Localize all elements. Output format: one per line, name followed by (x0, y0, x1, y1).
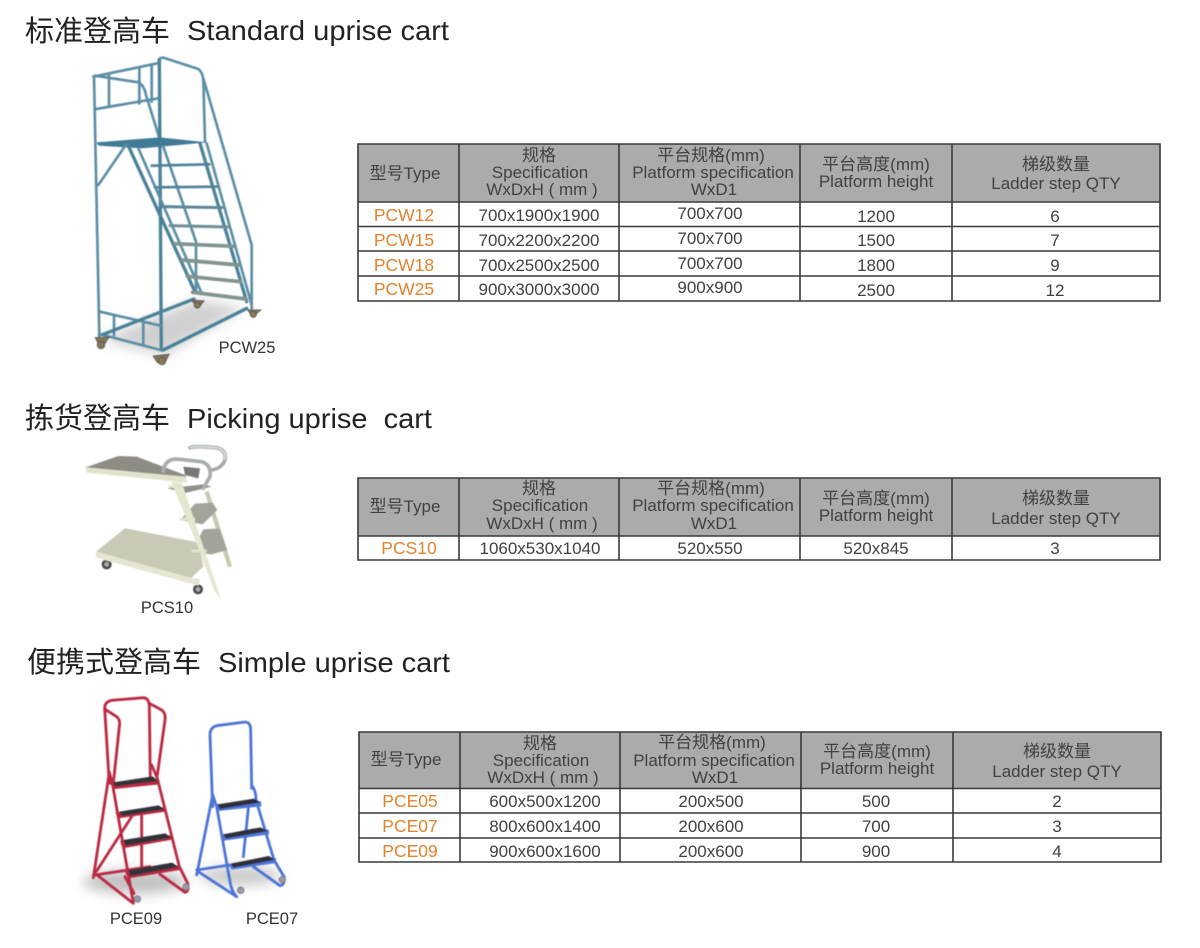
header labels: 梯级数量 (1022, 489, 1090, 508)
rows: 2 (1052, 792, 1062, 811)
title: Simple uprise cart: Simple uprise cart (218, 647, 450, 678)
title: Picking uprise cart: Picking uprise cart (187, 403, 432, 434)
title: Standard uprise cart: 标准登高车 (25, 15, 170, 48)
row: 520x845 (843, 539, 909, 558)
header labels: 规格 (522, 146, 556, 165)
header labels: Platform specification (633, 751, 795, 770)
rows (374, 204, 1064, 300)
rows: 7 (1050, 231, 1060, 250)
header labels: 平台高度(mm) (823, 742, 931, 761)
rows: 4 (1052, 842, 1062, 861)
header labels: WxDxH ( mm ) (486, 514, 598, 533)
table header band (359, 732, 1161, 789)
illustration: PCE07 blue step cart (197, 722, 286, 897)
row: PCS10 (381, 538, 437, 558)
rows: 900x600x1600 (489, 842, 601, 861)
header labels: 梯级数量 (1022, 155, 1090, 174)
title: Picking uprise cart (25, 402, 432, 435)
rows: 6 (1050, 207, 1060, 226)
header labels: Platform height (819, 506, 933, 525)
row: 3 (1050, 539, 1060, 558)
shadow: step cart floor shadows (83, 866, 280, 894)
header labels: WxDxH ( mm ) (487, 768, 599, 787)
rows: 900x3000x3000 (478, 280, 600, 299)
header labels: Platform specification (632, 163, 794, 182)
table grid (359, 732, 1161, 862)
illustration: PCE09 red step cart (93, 698, 189, 903)
header labels: WxD1 (691, 180, 737, 199)
header labels: 型号Type (370, 164, 440, 183)
header labels: Specification (492, 163, 588, 182)
table header band (358, 144, 1160, 202)
header labels (371, 733, 1122, 787)
row: 1060x530x1040 (479, 539, 601, 558)
header labels: Specification (493, 751, 589, 770)
rows: PCE09 (382, 841, 438, 861)
caption: PCE09: PCE09 (110, 910, 162, 928)
rows: 900 (862, 842, 890, 861)
rows: 900x900 (677, 278, 743, 297)
table: picking uprise cart (358, 478, 1160, 560)
row (381, 538, 1060, 558)
table grid (358, 478, 1160, 560)
header labels: 平台高度(mm) (822, 489, 930, 508)
table: simple uprise cart (359, 732, 1161, 862)
rows: 800x600x1400 (489, 817, 601, 836)
title: Standard uprise cart: Standard uprise cart (187, 15, 449, 46)
table header band (358, 478, 1160, 536)
rows: 200x600 (678, 842, 744, 861)
rows: 600x500x1200 (489, 792, 601, 811)
rows: 200x500 (678, 792, 744, 811)
rows: 12 (1046, 281, 1064, 300)
header labels: Platform height (819, 172, 933, 191)
rows: 700x700 (677, 229, 743, 248)
header labels (370, 146, 1121, 199)
rows: PCE07 (382, 816, 438, 836)
rows: PCW25 (374, 279, 434, 299)
rows: PCW12 (374, 205, 434, 225)
header labels: 平台规格(mm) (657, 479, 765, 498)
rows: 1800 (857, 256, 895, 275)
header labels: WxDxH ( mm ) (486, 180, 598, 199)
caption: PCE07: PCE07 (246, 910, 298, 928)
rows (382, 791, 1062, 861)
rows: 2500 (857, 281, 895, 300)
rows: 700x700 (677, 204, 743, 223)
rows: 9 (1050, 256, 1060, 275)
header labels: Ladder step QTY (991, 509, 1121, 528)
rows: 3 (1052, 817, 1062, 836)
header labels: 平台高度(mm) (822, 155, 930, 174)
rows: 700x700 (677, 254, 743, 273)
rows: 700x2500x2500 (478, 256, 600, 275)
header labels (370, 479, 1121, 533)
header labels: 平台规格(mm) (658, 733, 766, 752)
rows: 700x1900x1900 (478, 206, 600, 225)
illustration: PCS10 picking uprise cart (86, 447, 230, 598)
header labels: 规格 (523, 734, 557, 753)
header labels: WxD1 (691, 514, 737, 533)
rows: 700x2200x2200 (478, 231, 600, 250)
header labels: 梯级数量 (1023, 742, 1091, 761)
rows: 1500 (857, 231, 895, 250)
header labels: 平台规格(mm) (657, 146, 765, 165)
table grid (358, 144, 1160, 301)
header labels: Ladder step QTY (992, 762, 1122, 781)
header labels: Specification (492, 496, 588, 515)
rows: PCW18 (374, 255, 434, 275)
header labels: WxD1 (692, 768, 738, 787)
rows: 200x600 (678, 817, 744, 836)
title: Picking uprise cart: 拣货登高车 (25, 402, 170, 435)
row: 520x550 (677, 539, 743, 558)
title: Standard uprise cart (25, 15, 449, 48)
rows: 700 (862, 817, 890, 836)
caption: PCS10: PCS10 (141, 599, 193, 617)
header labels: 型号Type (370, 497, 440, 516)
title: Simple uprise cart (27, 646, 450, 679)
header labels: 型号Type (371, 750, 441, 769)
rows: 1200 (857, 207, 895, 226)
rows: PCW15 (374, 230, 434, 250)
table: standard uprise cart (358, 144, 1160, 301)
title: Simple uprise cart: 便携式登高车 (27, 646, 201, 679)
illustration: PCW25 standard uprise cart (93, 58, 261, 365)
header labels: Platform specification (632, 496, 794, 515)
shadow: PCW25 floor shadow (100, 300, 245, 355)
header labels: Ladder step QTY (991, 174, 1121, 193)
rows: 500 (862, 792, 890, 811)
caption: PCW25: PCW25 (219, 339, 275, 357)
header labels: Platform height (820, 759, 934, 778)
rows: PCE05 (382, 791, 438, 811)
header labels: 规格 (522, 479, 556, 498)
